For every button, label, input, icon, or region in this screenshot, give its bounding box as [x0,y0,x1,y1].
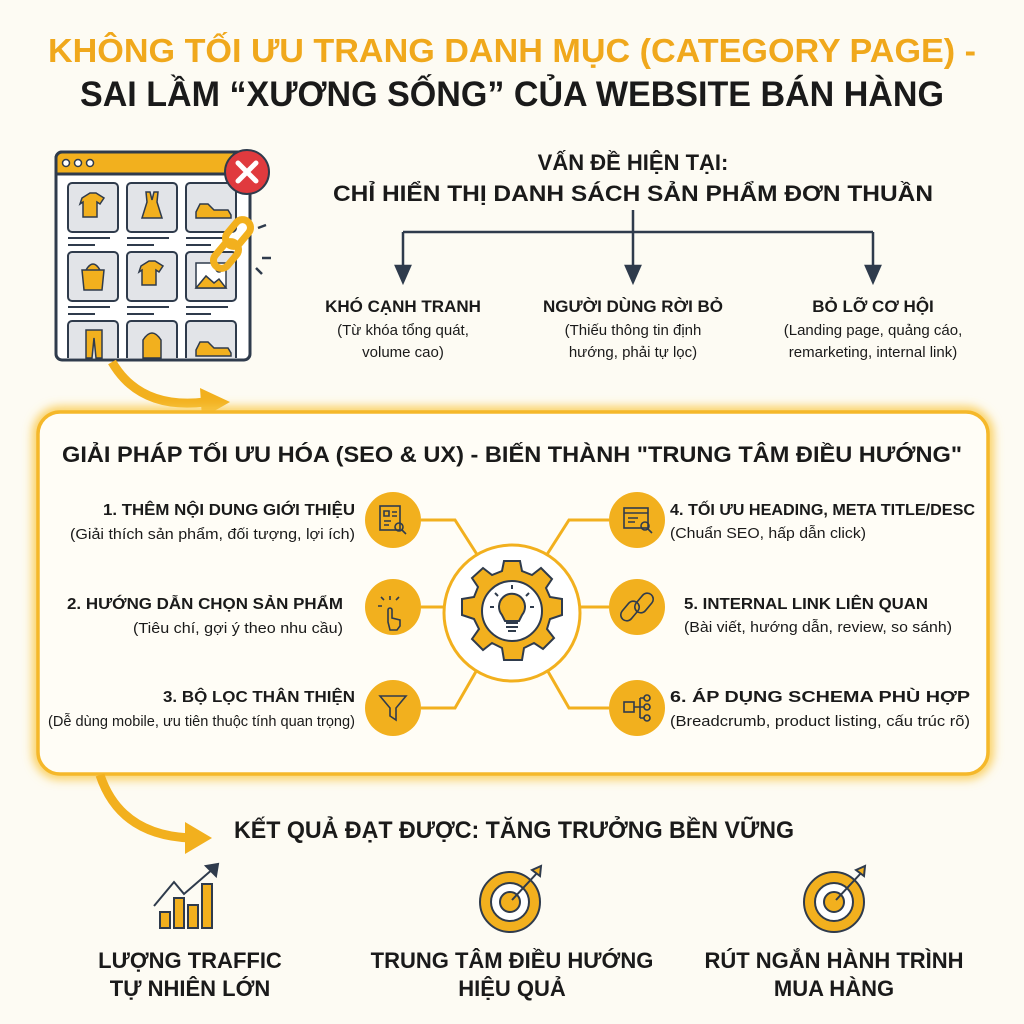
item 2 [67,594,343,637]
item 1: 1. THÊM NỘI DUNG GIỚI THIỆU [103,500,355,519]
panel heading: GIẢI PHÁP TỐI ƯU HÓA (SEO & UX) - BIẾN THÀNH "TRUNG TÂM ĐIỀU HƯỚNG" [62,441,962,467]
icon: target 1 [480,866,541,932]
connectors [421,520,609,708]
problem: nguoi dung roi bo: (Thiếu thông tin định [565,322,701,339]
problem: kho canh tranh: KHÓ CẠNH TRANH [325,297,481,316]
item 3: (Dễ dùng mobile, ưu tiên thuộc tính quan trọng) [48,713,355,730]
item 3: 3. BỘ LỌC THÂN THIỆN [163,687,355,706]
result labels [98,948,964,1001]
arrow: solution to results [100,775,212,854]
item 6 [670,687,970,730]
results heading: KẾT QUẢ ĐẠT ĐƯỢC: TĂNG TRƯỞNG BỀN VỮNG [234,815,794,844]
item 5: 5. INTERNAL LINK LIÊN QUAN [684,594,928,613]
icon: target 2 [804,866,865,932]
problem: kho canh tranh: (Từ khóa tổng quát, [337,322,469,339]
item 4 [670,499,975,542]
icon: broken link chain [210,216,271,274]
icon: growth chart [154,864,218,928]
item 1 [70,500,355,543]
item 5: (Bài viết, hướng dẫn, review, so sánh) [684,619,952,636]
problem: nguoi dung roi bo [543,297,723,361]
item 4: (Chuẩn SEO, hấp dẫn click) [670,525,866,542]
problem heading: VẤN ĐỀ HIỆN TẠI: [538,150,728,175]
item 1: (Giải thích sản phẩm, đối tượng, lợi ích) [70,526,355,543]
problem heading: CHỈ HIỂN THỊ DANH SÁCH SẢN PHẨM ĐƠN THUẦN [333,181,933,206]
arrow: illustration to solution [112,362,230,418]
problem: bo lo co hoi [784,296,962,361]
tree arrows [396,210,880,282]
problem: bo lo co hoi: remarketing, internal link) [789,344,957,361]
title: KHÔNG TỐI ƯU TRANG DANH MỤC (CATEGORY PAGE) - [48,31,976,69]
result labels: LƯỢNG TRAFFIC [98,948,282,973]
item 6: (Breadcrumb, product listing, cấu trúc rõ) [670,713,970,730]
result labels: MUA HÀNG [774,976,894,1001]
problem: bo lo co hoi: BỎ LỠ CƠ HỘI [812,296,934,316]
result labels: TỰ NHIÊN LỚN [110,976,270,1001]
panel: solution [38,412,988,774]
center gear with bulb [444,545,580,681]
problem: kho canh tranh: volume cao) [362,344,444,361]
item 4: 4. TỐI ƯU HEADING, META TITLE/DESC [670,499,975,519]
result labels: TRUNG TÂM ĐIỀU HƯỚNG [371,948,653,973]
icon circles [365,492,665,736]
problem: nguoi dung roi bo: hướng, phải tự lọc) [569,344,697,361]
problem: nguoi dung roi bo: NGƯỜI DÙNG RỜI BỎ [543,297,723,316]
icon: red x error [225,150,269,194]
result labels: HIỆU QUẢ [458,976,566,1001]
problem heading [333,150,933,206]
item 2: (Tiêu chí, gợi ý theo nhu cầu) [133,620,343,637]
problem: kho canh tranh [325,297,481,361]
title [48,31,976,114]
result labels: RÚT NGẮN HÀNH TRÌNH [704,948,964,973]
illustration: category page browser [56,152,250,360]
item 2: 2. HƯỚNG DẪN CHỌN SẢN PHẨM [67,594,343,613]
item 6: 6. ÁP DỤNG SCHEMA PHÙ HỢP [670,687,970,706]
item 3 [48,687,355,730]
problem: bo lo co hoi: (Landing page, quảng cáo, [784,322,962,339]
item 5 [684,594,952,636]
title: SAI LẦM “XƯƠNG SỐNG” CỦA WEBSITE BÁN HÀNG [80,74,944,114]
